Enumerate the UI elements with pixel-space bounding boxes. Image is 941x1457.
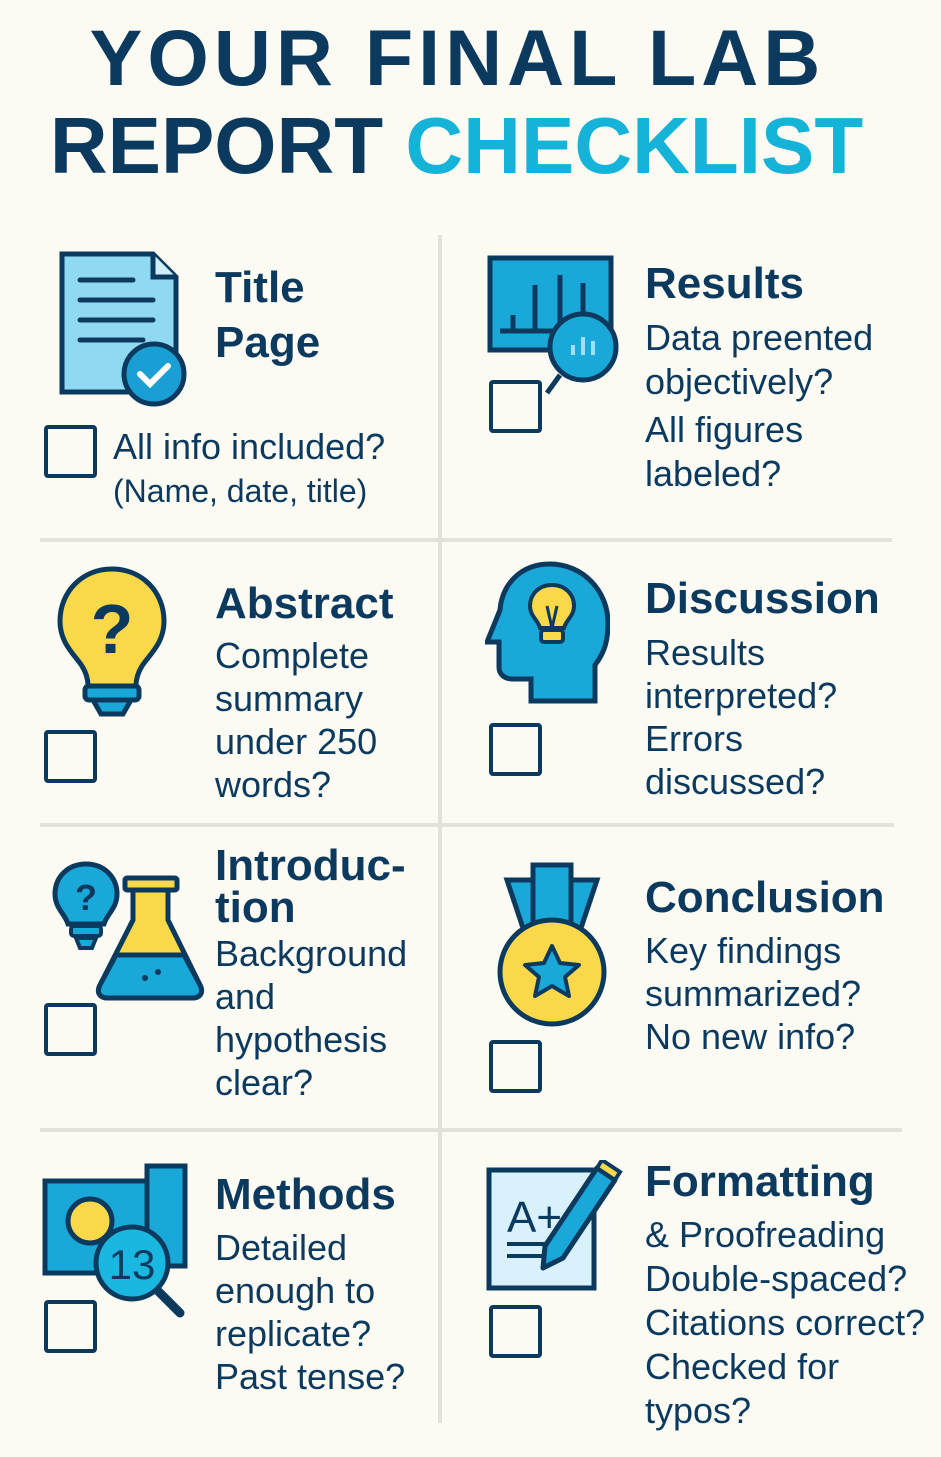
text xyxy=(645,317,873,494)
text: enough to xyxy=(215,1270,375,1311)
text: typos? xyxy=(645,1390,751,1431)
icon: lightbulb question: ? xyxy=(91,590,133,668)
checkbox xyxy=(489,380,542,433)
heading: Title xyxy=(215,263,305,312)
checkbox xyxy=(44,1300,97,1353)
panel: methods xyxy=(42,1164,405,1397)
text: Background xyxy=(215,933,407,974)
text: replicate? xyxy=(215,1313,371,1354)
text: interpreted? xyxy=(645,675,837,716)
text: No new info? xyxy=(645,1016,855,1057)
heading xyxy=(215,263,320,367)
text: words? xyxy=(215,764,331,805)
icon: lightbulb question xyxy=(58,566,166,716)
heading xyxy=(215,841,406,932)
text: objectively? xyxy=(645,361,833,402)
checkbox xyxy=(44,1003,97,1056)
text xyxy=(215,1227,405,1397)
heading: Results xyxy=(645,259,804,308)
text xyxy=(113,426,385,509)
text: & Proofreading xyxy=(645,1214,885,1255)
text: clear? xyxy=(215,1062,313,1103)
text xyxy=(215,635,377,805)
icon: picture with magnifier 13 xyxy=(42,1164,188,1318)
panel: formatting xyxy=(486,1157,925,1431)
text: under 250 xyxy=(215,721,377,762)
text xyxy=(645,930,861,1057)
text: Detailed xyxy=(215,1227,347,1268)
panel: abstract xyxy=(44,566,394,805)
heading: tion xyxy=(215,883,296,932)
icon: document xyxy=(60,252,186,406)
icon: picture with magnifier 13: 13 xyxy=(109,1241,155,1288)
checkbox xyxy=(489,723,542,776)
title: YOUR FINAL LAB xyxy=(90,13,825,102)
panel: results xyxy=(488,256,873,494)
text: Past tense? xyxy=(215,1356,405,1397)
panel: introduction xyxy=(44,841,407,1103)
heading: Formatting xyxy=(645,1157,875,1206)
icon: head with bulb xyxy=(485,562,610,704)
text: Checked for xyxy=(645,1346,839,1387)
text: Data preented xyxy=(645,317,873,358)
icon: bulb and flask xyxy=(52,862,204,1000)
text: summarized? xyxy=(645,973,861,1014)
icon: chart with magnifier xyxy=(488,256,618,394)
text: Key findings xyxy=(645,930,841,971)
heading: Page xyxy=(215,318,320,367)
text: hypothesis xyxy=(215,1019,387,1060)
title xyxy=(50,13,863,190)
text xyxy=(645,632,837,802)
text: All figures xyxy=(645,409,803,450)
text: Citations correct? xyxy=(645,1302,925,1343)
heading: Conclusion xyxy=(645,873,885,922)
panel: conclusion xyxy=(489,862,885,1093)
panel: title page xyxy=(44,252,385,509)
heading: Methods xyxy=(215,1170,396,1219)
text: (Name, date, title) xyxy=(113,473,367,509)
checkbox xyxy=(489,1305,542,1358)
text: Errors xyxy=(645,718,743,759)
text: labeled? xyxy=(645,453,781,494)
heading: Abstract xyxy=(215,579,394,628)
icon: bulb and flask: ? xyxy=(75,877,97,918)
text: Results xyxy=(645,632,765,673)
icon: A+ paper with pencil xyxy=(486,1160,623,1290)
title: REPORT CHECKLIST xyxy=(50,101,863,190)
text xyxy=(215,933,407,1103)
text xyxy=(645,1214,925,1431)
heading: Introduc- xyxy=(215,841,406,890)
icon: A+ paper with pencil: A+ xyxy=(507,1193,562,1242)
checkbox xyxy=(489,1040,542,1093)
checkbox xyxy=(44,425,97,478)
icon: medal xyxy=(498,862,606,1026)
text: Complete xyxy=(215,635,369,676)
text: All info included? xyxy=(113,426,385,467)
panel: discussion xyxy=(485,562,880,802)
checkbox xyxy=(44,730,97,783)
heading: Discussion xyxy=(645,574,880,623)
text: and xyxy=(215,976,275,1017)
text: discussed? xyxy=(645,761,825,802)
text: summary xyxy=(215,678,363,719)
text: Double-spaced? xyxy=(645,1258,907,1299)
